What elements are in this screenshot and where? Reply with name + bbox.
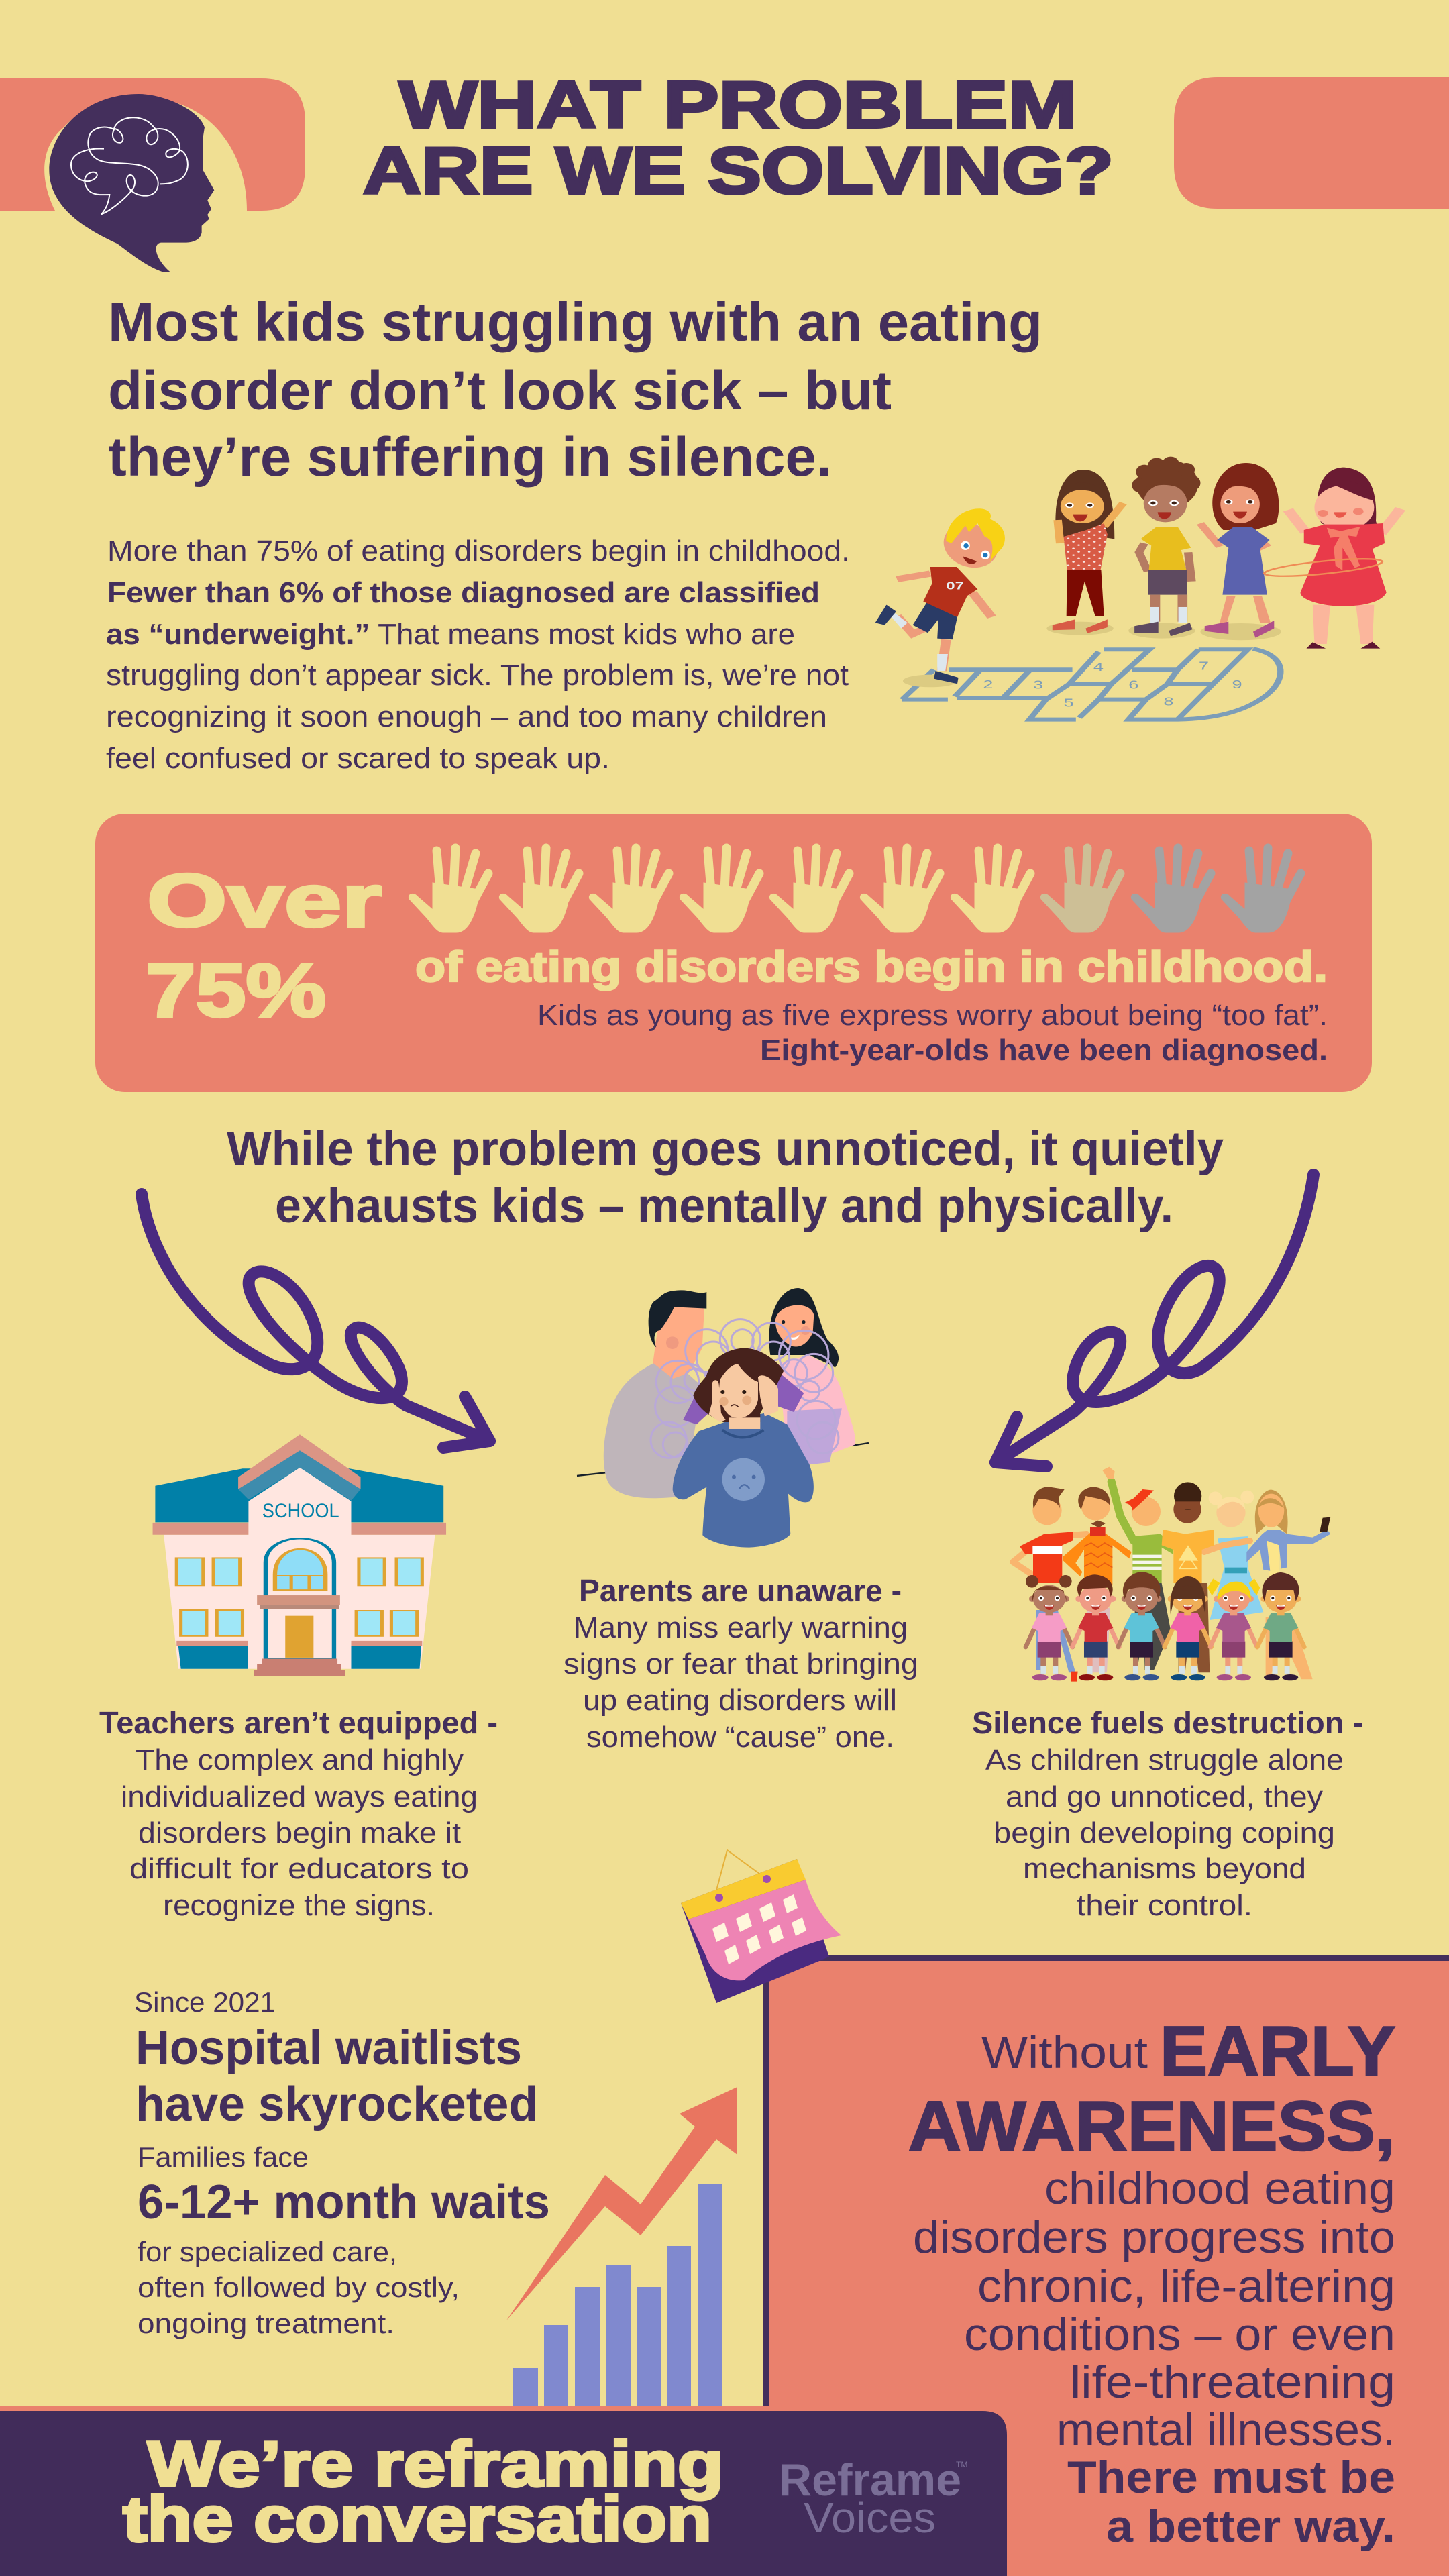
headline: most kids: Most kids struggling with an eating (108, 292, 1042, 353)
father (604, 1290, 706, 1498)
text: waitlists: Families face (138, 2141, 309, 2173)
header band right (1174, 77, 1449, 209)
text: silence: mechanisms beyond (1023, 1852, 1306, 1885)
illustration: school building: SCHOOL (262, 1499, 339, 1522)
boy with curly hair (1128, 457, 1200, 639)
text: teachers: difficult for educators to (129, 1852, 469, 1885)
title: WHAT PROBLEM (399, 68, 1077, 142)
callout body: life-threatening (1070, 2357, 1395, 2408)
text: parents: Parents are unaware - (579, 1573, 902, 1608)
illustration: kids playing hopscotch: 7 (1199, 659, 1209, 672)
headline: most kids: disorder don’t look sick – but (108, 360, 892, 421)
child with hands on head (673, 1348, 814, 1548)
text: silence (972, 1705, 1363, 1922)
body text: more than 75%: struggling don’t appear sick. The problem is, we’re not (106, 659, 849, 692)
illustration: kids playing hopscotch (875, 457, 1401, 720)
bar chart with rising arrow (506, 2087, 737, 2406)
body text: more than 75%: Fewer than 6% of those diagnosed are classified (107, 576, 820, 609)
panel note: Kids as young as five express worry about being “too fat”. (537, 999, 1328, 1032)
running boy: 07 (946, 580, 964, 592)
worry scribbles (651, 1320, 839, 1458)
illustration: kids playing hopscotch: 4 (1093, 660, 1104, 674)
footer band (0, 2406, 1007, 2576)
illustration: kids playing hopscotch: 6 (1128, 678, 1138, 691)
arrow: right swirl (996, 1175, 1313, 1466)
teen heads (1032, 1482, 1288, 1534)
callout heading: EARLY (1160, 2012, 1395, 2090)
text: silence: Silence fuels destruction - (972, 1705, 1363, 1740)
mother (769, 1288, 855, 1464)
illustration: kids playing hopscotch: 9 (1232, 678, 1242, 691)
girl waving (1046, 470, 1123, 635)
section heading (227, 1122, 1224, 1233)
text: parents: up eating disorders will (583, 1684, 897, 1717)
text: waitlists: often followed by costly, (138, 2271, 460, 2303)
icon: calendar (681, 1850, 841, 2003)
panel note (537, 999, 1328, 1067)
text: waitlists: have skyrocketed (136, 2078, 538, 2131)
footer headline: the conversation (123, 2483, 712, 2555)
text: teachers: individualized ways eating (121, 1780, 478, 1813)
panel: over 75% (95, 814, 1372, 1092)
girl in blue dress (1200, 463, 1281, 640)
callout body: mental illnesses. (1057, 2404, 1395, 2455)
text: waitlists: Since 2021 (134, 1986, 276, 2018)
panel note: Eight-year-olds have been diagnosed. (760, 1034, 1328, 1067)
hopscotch grid (902, 649, 1281, 720)
text: silence: and go unnoticed, they (1006, 1780, 1323, 1813)
callout body: childhood eating (1044, 2163, 1395, 2214)
illustration: kids playing hopscotch: 8 (1164, 695, 1174, 708)
title: ARE WE SOLVING? (363, 133, 1114, 207)
illustration: group of children and teens (1013, 1467, 1330, 1682)
logo: reframe voices (779, 2455, 967, 2542)
stat: over 75%: 75% (146, 949, 326, 1032)
teen group (1013, 1467, 1330, 1682)
title (363, 68, 1114, 207)
panel: without early awareness (763, 1955, 1449, 2576)
text: teachers: recognize the signs. (163, 1889, 435, 1922)
text: teachers: disorders begin make it (138, 1817, 461, 1849)
callout body (913, 2163, 1395, 2552)
callout body: There must be (1067, 2452, 1395, 2503)
callout body: disorders progress into (913, 2212, 1395, 2263)
text: teachers (99, 1705, 498, 1922)
body text: more than 75%: feel confused or scared to speak up. (106, 742, 610, 775)
logo: reframe voices: Reframe (779, 2455, 961, 2506)
icon row: ten hands (409, 848, 1301, 932)
illustration: kids playing hopscotch: 2 (983, 678, 993, 691)
text: silence: begin developing coping (994, 1817, 1335, 1849)
callout heading (908, 2012, 1395, 2165)
callout body: chronic, life-altering (977, 2261, 1395, 2312)
body text: more than 75%: as “underweight.” That means most kids who are (106, 618, 795, 651)
stat: over 75% (146, 859, 382, 1032)
text: waitlists: for specialized care, (138, 2236, 397, 2267)
text: parents: somehow “cause” one. (586, 1721, 894, 1754)
text: teachers: The complex and highly (136, 1743, 464, 1776)
body text: more than 75%: recognizing it soon enough – and too many children (106, 700, 827, 733)
text: silence: their control. (1077, 1889, 1252, 1922)
stat: over 75%: Over (147, 859, 382, 943)
callout heading: AWARENESS, (908, 2088, 1395, 2165)
children row (1026, 1572, 1304, 1680)
section heading: While the problem goes unnoticed, it quietly (227, 1122, 1224, 1176)
text: parents: Many miss early warning (574, 1611, 908, 1644)
icon: head with brain (44, 94, 247, 272)
girl with hula hoop (1263, 468, 1401, 649)
body text: more than 75%: More than 75% of eating disorders begin in childhood. (107, 535, 850, 568)
illustration: parents and worried child (577, 1288, 869, 1548)
illustration: kids playing hopscotch: 3 (1033, 678, 1043, 691)
text: parents: signs or fear that bringing (564, 1648, 918, 1680)
illustration: school building (153, 1434, 446, 1676)
text: parents (564, 1573, 918, 1754)
arrow: left swirl (142, 1194, 490, 1448)
text: waitlists: ongoing treatment. (138, 2308, 394, 2339)
callout heading: Without (981, 2027, 1148, 2077)
footer headline: We’re reframing (148, 2428, 724, 2500)
body text: more than 75% (106, 535, 850, 775)
header band left (0, 78, 305, 211)
logo: reframe voices: TM (956, 2460, 967, 2469)
text: teachers: Teachers aren’t equipped - (99, 1705, 498, 1740)
section heading: exhausts kids – mentally and physically. (275, 1179, 1173, 1233)
text: silence: As children struggle alone (985, 1743, 1344, 1776)
illustration: kids playing hopscotch: 5 (1063, 696, 1074, 709)
footer headline (123, 2428, 724, 2555)
text: waitlists: 6-12+ month waits (138, 2176, 550, 2229)
text: waitlists (134, 1986, 550, 2339)
logo: reframe voices: Voices (804, 2493, 936, 2542)
headline: most kids (108, 292, 1042, 488)
callout body: conditions – or even (964, 2309, 1395, 2360)
text: waitlists: Hospital waitlists (136, 2021, 522, 2075)
headline: most kids: they’re suffering in silence. (108, 427, 832, 488)
panel subtitle: of eating disorders begin in childhood. (415, 943, 1328, 991)
callout body: a better way. (1106, 2501, 1395, 2552)
running boy (875, 508, 1005, 687)
